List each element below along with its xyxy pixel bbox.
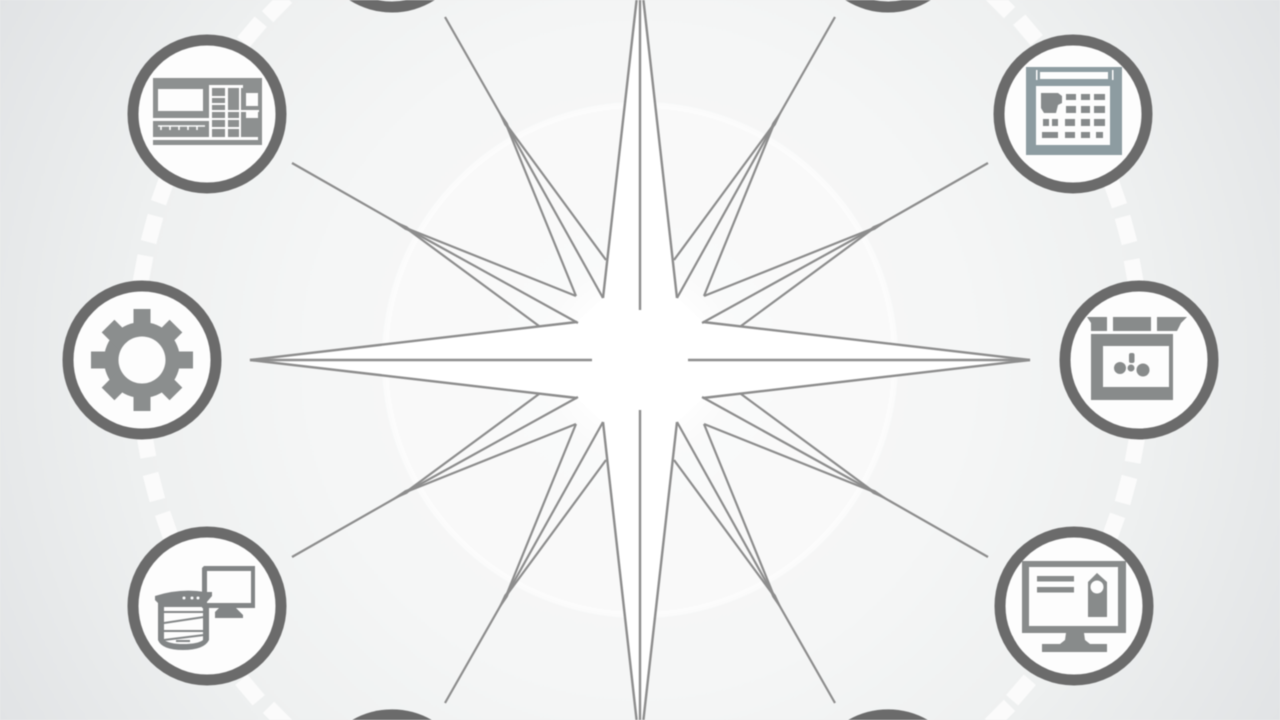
centre glow (540, 260, 740, 460)
icon: monitor with tag (1022, 561, 1126, 652)
icon: calendar (1026, 67, 1122, 155)
upper right secondary rays (674, 17, 988, 326)
badge: monitor with tag (1000, 532, 1148, 680)
top left cropped ring (349, 0, 435, 13)
icon: jar and computer (155, 566, 255, 650)
main star points (250, 0, 1030, 720)
compass star (250, 0, 1030, 720)
icon: gear (91, 309, 193, 411)
lower left secondary rays (292, 394, 606, 703)
badge: oven (1065, 286, 1213, 434)
central pale disc (385, 105, 895, 615)
badge: gear (68, 286, 216, 434)
bottom right cropped ring (848, 709, 928, 720)
star fill (250, 0, 1030, 720)
upper left secondary rays (292, 17, 606, 326)
top right cropped ring (845, 0, 931, 13)
dashed white ring (133, 0, 1145, 720)
badge: jar and computer (133, 532, 281, 680)
icon: oven (1087, 317, 1187, 400)
lower right secondary rays (674, 394, 988, 703)
bottom left cropped ring (352, 709, 432, 720)
icon: control panel (153, 78, 262, 145)
badge: calendar (999, 40, 1147, 188)
badge: control panel (133, 40, 281, 188)
